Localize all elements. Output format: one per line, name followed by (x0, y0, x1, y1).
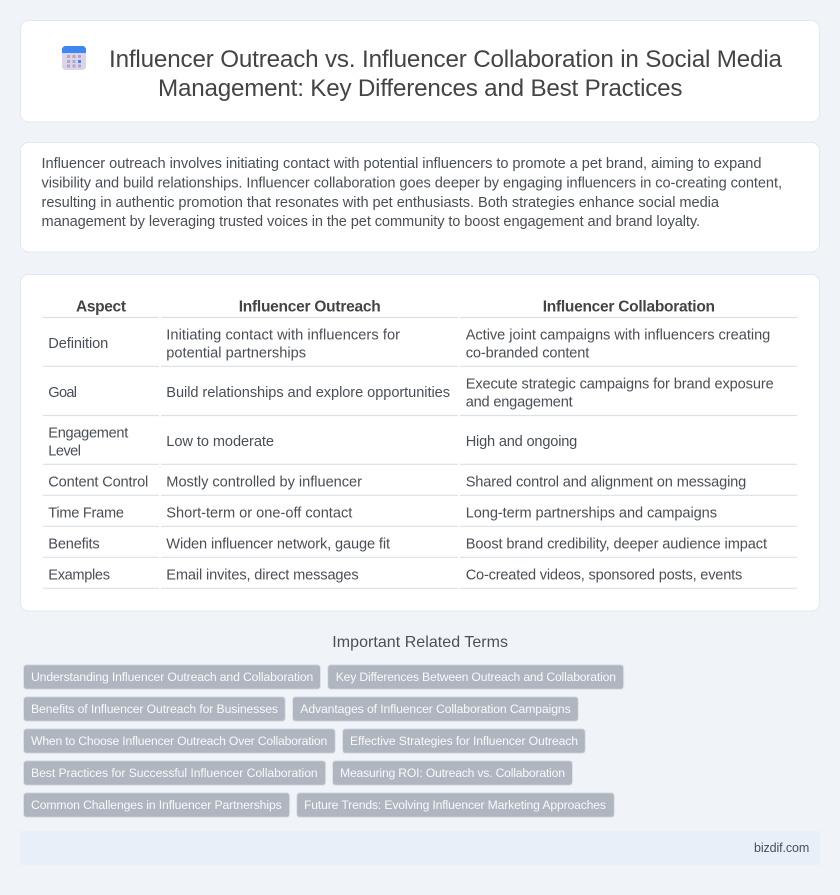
row: goal (48, 376, 774, 410)
row: examples (48, 567, 742, 583)
icon: calendar (62, 46, 86, 70)
row: goal: and engagement (466, 394, 573, 410)
tag: Common Challenges in Influencer Partnerships (31, 798, 282, 812)
panel: related term tags (24, 665, 624, 817)
table header row: Aspect (76, 299, 126, 316)
panel: comparison table (20, 274, 820, 611)
intro paragraph: management by leveraging trusted voices in the pet community to boost engagement and brand loyalty. (42, 214, 700, 230)
intro paragraph: resulting in authentic promotion that resonates with pet enthusiasts. Both strategies enhance social media (42, 195, 720, 211)
tag: Advantages of Influencer Collaboration Campaigns (300, 702, 571, 716)
row: benefits: Boost brand credibility, deeper audience impact (466, 536, 767, 552)
intro paragraph: visibility and build relationships. Influencer collaboration goes deeper by engaging influencers in co-creating content, (42, 175, 782, 191)
tag (342, 729, 585, 753)
row: time frame: Long-term partnerships and campaigns (466, 505, 717, 521)
panel: introduction text (20, 142, 820, 252)
tag (297, 793, 614, 817)
intro paragraph (42, 156, 782, 230)
row: engagement level: High and ongoing (466, 434, 577, 450)
title: Influencer Outreach vs. Influencer Collaboration in Social Media (109, 46, 783, 73)
tag (24, 697, 285, 721)
row: content control: Mostly controlled by influencer (166, 474, 362, 490)
row: definition: Initiating contact with influencers for (166, 327, 400, 343)
footer (20, 831, 820, 865)
footer: bizdif.com (754, 841, 809, 855)
panel: header (20, 20, 820, 122)
row: time frame (48, 505, 717, 521)
row: definition: potential partnerships (166, 345, 306, 361)
row: content control (48, 474, 746, 490)
row: examples: Examples (48, 567, 110, 583)
heading: important related terms: Important Related Terms (332, 634, 508, 651)
row: engagement level: Low to moderate (166, 434, 274, 450)
tag: Key Differences Between Outreach and Collaboration (336, 670, 616, 684)
tag: Effective Strategies for Influencer Outreach (350, 734, 578, 748)
row: definition: co-branded content (466, 345, 589, 361)
row: benefits: Benefits (48, 536, 100, 552)
row: content control: Shared control and alignment on messaging (466, 474, 746, 490)
table header row: Influencer Collaboration (543, 299, 715, 316)
intro paragraph: Influencer outreach involves initiating contact with potential influencers to promote a pet brand, aiming to expand (42, 156, 762, 172)
tag: Best Practices for Successful Influencer Collaboration (31, 766, 318, 780)
table header row (76, 299, 715, 316)
row: definition: Active joint campaigns with influencers creating (466, 327, 770, 343)
title: Management: Key Differences and Best Practices (158, 75, 682, 102)
tag (332, 761, 572, 785)
tag (24, 793, 290, 817)
row: definition: Definition (48, 336, 108, 352)
row: engagement level (48, 425, 577, 459)
tag: Understanding Influencer Outreach and Collaboration (31, 670, 313, 684)
tag: Measuring ROI: Outreach vs. Collaboration (340, 766, 565, 780)
tag (328, 665, 624, 689)
tag (24, 665, 320, 689)
title (109, 46, 783, 102)
row: benefits (48, 536, 767, 552)
tag: Benefits of Influencer Outreach for Businesses (31, 702, 278, 716)
row: goal: Build relationships and explore opportunities (166, 385, 450, 401)
tag (24, 729, 335, 753)
row: benefits: Widen influencer network, gauge fit (166, 536, 390, 552)
row: engagement level: Engagement (48, 425, 128, 441)
row: content control: Content Control (48, 474, 148, 490)
tag (292, 697, 578, 721)
row: goal: Goal (48, 385, 77, 401)
row: definition (48, 327, 770, 361)
row: time frame: Short-term or one-off contact (166, 505, 352, 521)
table header row: Influencer Outreach (239, 299, 381, 316)
tag: When to Choose Influencer Outreach Over Collaboration (31, 734, 327, 748)
row: goal: Execute strategic campaigns for brand exposure (466, 376, 774, 392)
row: engagement level: Level (48, 443, 81, 459)
row: time frame: Time Frame (48, 505, 124, 521)
tag: Future Trends: Evolving Influencer Marketing Approaches (304, 798, 606, 812)
row: examples: Co-created videos, sponsored posts, events (466, 567, 742, 583)
tag (24, 761, 326, 785)
row: examples: Email invites, direct messages (166, 567, 359, 583)
